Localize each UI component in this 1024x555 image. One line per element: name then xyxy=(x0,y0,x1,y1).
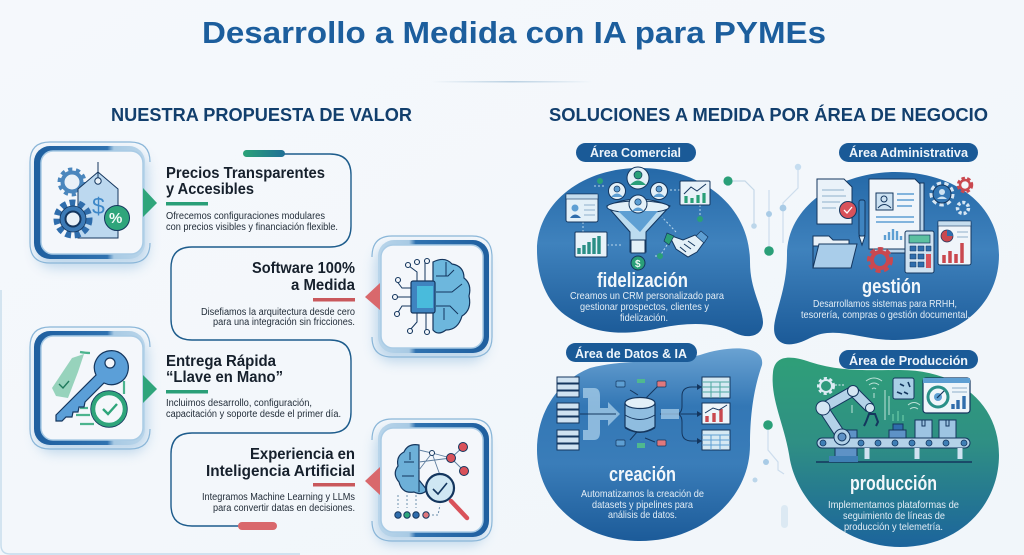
area heading: gestión xyxy=(862,275,921,298)
icon: funnel and customers xyxy=(566,167,710,270)
area heading: fidelización xyxy=(597,269,688,292)
area heading: creación xyxy=(609,463,676,486)
decorative connectors: lower xyxy=(752,420,788,528)
text block: experiencia xyxy=(202,446,355,514)
text block: precios: con precios visibles y financiación flexible. xyxy=(166,222,338,233)
blob xyxy=(773,358,999,547)
text block: experiencia: para convertir datas en decisiones. xyxy=(213,503,355,514)
area description: Automatizamos la creación de xyxy=(581,489,704,500)
pill label xyxy=(576,143,696,162)
icon: data pipeline xyxy=(557,377,730,450)
panel: software xyxy=(201,236,492,362)
text block: entrega: Incluimos desarrollo, configuración, xyxy=(166,398,312,409)
text block: experiencia: Integramos Machine Learning y LLMs xyxy=(202,492,355,503)
text block: precios: Precios Transparentes xyxy=(166,165,325,182)
area description: producción y telemetría. xyxy=(844,522,943,533)
text block: precios: Ofrecemos configuraciones modulares xyxy=(166,211,325,222)
connector outline of value cards xyxy=(171,154,351,526)
area description: seguimiento de líneas de xyxy=(843,511,945,522)
text block: software: a Medida xyxy=(291,277,355,294)
arrow: red xyxy=(365,283,380,310)
icon frame: price tag: $ xyxy=(92,193,105,219)
icon frame: key xyxy=(30,327,150,453)
area description: Desarrollamos sistemas para RRHH, xyxy=(813,299,957,310)
blob xyxy=(774,172,999,344)
pill label xyxy=(839,143,978,162)
pill label xyxy=(566,343,697,362)
icon frame: price tag: % xyxy=(109,210,122,227)
icon frame: price tag xyxy=(30,142,150,268)
text block: software: para una integración sin fricciones. xyxy=(213,317,355,328)
text block: experiencia: Inteligencia Artificial xyxy=(206,463,355,480)
pill label: Área Comercial xyxy=(590,145,681,160)
text block: entrega: “Llave en Mano” xyxy=(166,369,283,386)
text block: entrega: capacitación y soporte desde el primer día. xyxy=(166,409,341,420)
panel: area datos e IA xyxy=(537,343,762,541)
text block: precios xyxy=(166,165,338,233)
blob xyxy=(537,348,762,541)
panel: area administrativa xyxy=(774,143,999,344)
area description: gestionar prospectos, clientes y xyxy=(580,302,710,313)
area description: datasets y pipelines para xyxy=(592,500,693,511)
text block: software xyxy=(201,260,356,328)
decorative connectors: upper xyxy=(723,164,801,256)
text block: software: Disefiamos la arquitectura desde cero xyxy=(201,307,356,318)
title: Desarrollo a Medida con IA para PYMEs xyxy=(202,15,826,50)
area description xyxy=(581,489,704,521)
area description: fidelización. xyxy=(620,313,668,324)
arrow: green xyxy=(143,375,157,403)
area description xyxy=(801,299,970,321)
panel: experiencia xyxy=(202,419,492,545)
text block: experiencia: Experiencia en xyxy=(250,446,355,463)
panel: precios xyxy=(30,142,338,268)
icon frame: AI brain xyxy=(372,419,492,545)
text block: entrega xyxy=(166,353,341,420)
area description: Implementamos plataformas de xyxy=(828,500,959,511)
icon: office documents xyxy=(813,179,971,273)
arrow: red xyxy=(365,467,380,495)
pill label: Área Administrativa xyxy=(849,145,969,160)
area description: tesorería, compras o gestión documental. xyxy=(801,310,970,321)
area description: análisis de datos. xyxy=(608,510,677,521)
icon frame: chip brain xyxy=(372,236,492,362)
heading: soluciones: SOLUCIONES A MEDIDA POR ÁREA DE NEGOCIO xyxy=(549,104,988,125)
arrow: green xyxy=(143,188,157,217)
red pill accent xyxy=(238,522,277,530)
area description: Creamos un CRM personalizado para xyxy=(570,291,724,302)
pill label: Área de Producción xyxy=(849,353,968,368)
text block: software: Software 100% xyxy=(252,260,355,277)
area description xyxy=(570,291,724,324)
text block: precios: y Accesibles xyxy=(166,181,254,198)
panel: entrega xyxy=(30,327,341,453)
panel: area comercial xyxy=(537,143,763,336)
pill label xyxy=(839,350,978,369)
icon: robot production line xyxy=(816,378,972,462)
panel: area produccion xyxy=(773,350,999,547)
blob xyxy=(537,168,763,336)
area heading: producción xyxy=(850,472,937,495)
pill label: Área de Datos & IA xyxy=(575,346,687,361)
green pill accent xyxy=(243,150,285,157)
text block: entrega: Entrega Rápida xyxy=(166,353,276,370)
heading: propuesta de valor: NUESTRA PROPUESTA DE VALOR xyxy=(111,105,412,125)
area description xyxy=(828,500,959,533)
icon: funnel and customers: $ xyxy=(635,259,641,270)
